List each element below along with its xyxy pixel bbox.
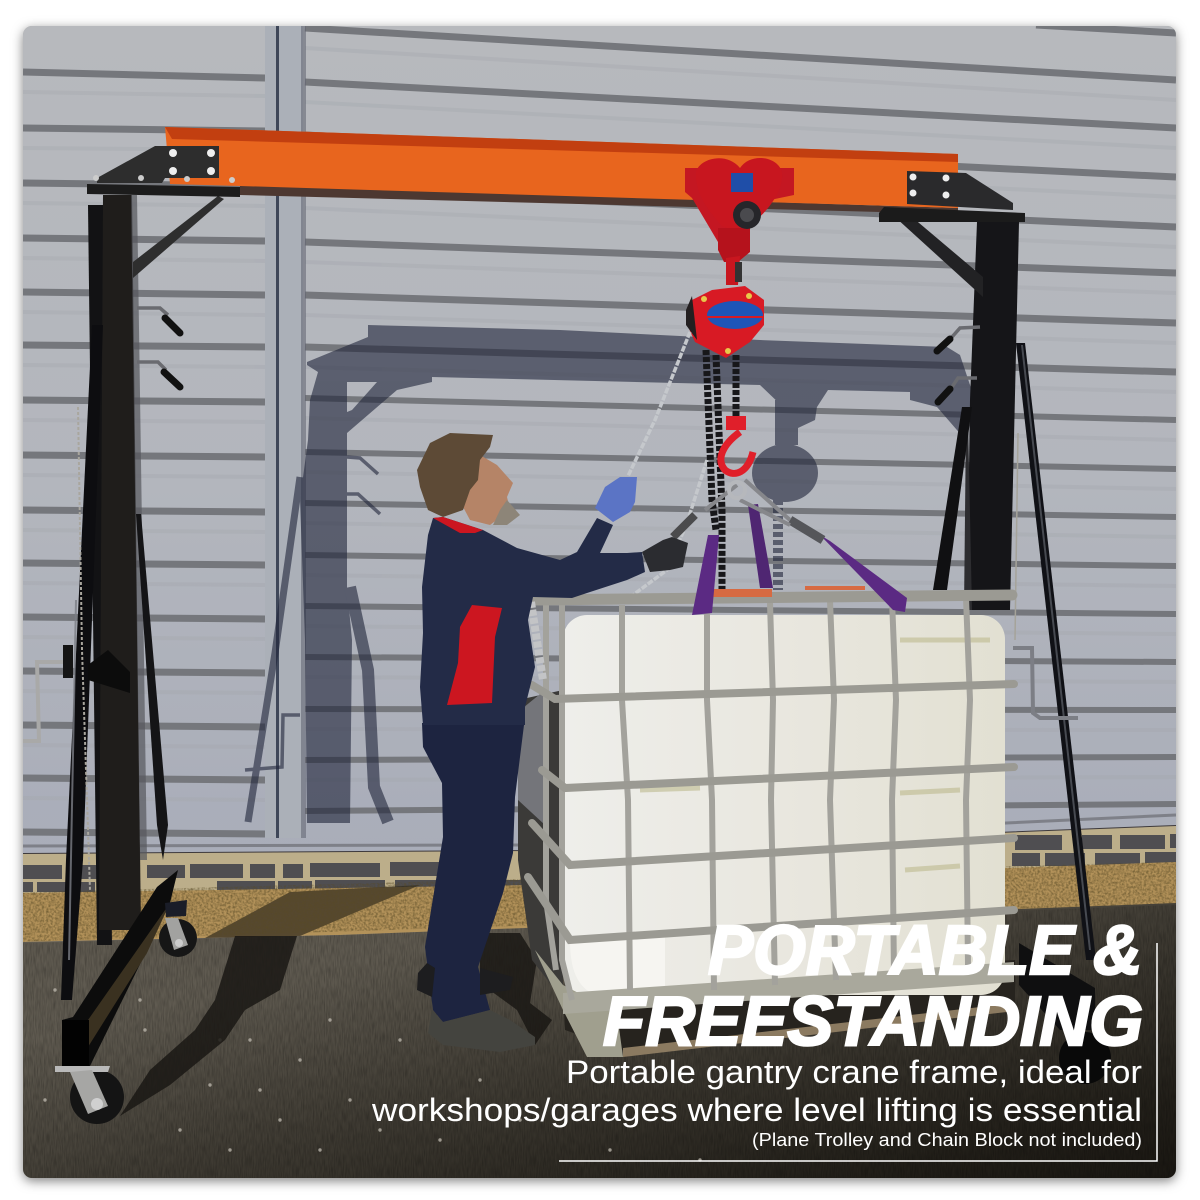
gantry shadow on ground: [120, 936, 297, 1116]
lifting hook: [721, 416, 753, 498]
description line two: workshops/garages where level lifting is essential: [371, 1092, 1142, 1128]
concrete ground: [23, 903, 1176, 1178]
main column: [99, 195, 141, 930]
handles: [952, 327, 980, 387]
base: [1019, 943, 1095, 1030]
lower glove: [642, 537, 688, 572]
gravel bed: [23, 860, 1176, 945]
chain block: [686, 286, 764, 358]
strut: [900, 222, 983, 296]
hand chain: [627, 332, 709, 594]
man: [417, 433, 688, 1052]
wall cladding: [23, 25, 1176, 856]
heading line two: FREESTANDING: [603, 982, 1143, 1060]
handles: [137, 308, 168, 370]
crank handle: [22, 662, 63, 741]
hair: [417, 433, 493, 517]
orange tank cap: [712, 586, 865, 597]
front boot: [428, 1010, 535, 1052]
left bracket: [87, 146, 240, 197]
load chains: [706, 350, 736, 590]
tank stains: [640, 640, 990, 870]
rope: [1015, 433, 1018, 640]
pallet: [535, 950, 623, 1057]
crank handle: [1013, 648, 1078, 718]
rails: [528, 595, 1014, 940]
side chain: [531, 602, 543, 680]
strut: [133, 196, 224, 278]
upper glove: [595, 477, 637, 522]
rope: [78, 407, 90, 890]
column: [967, 222, 1019, 610]
gantry: left frame: [22, 195, 224, 1066]
pallet dark gap: [563, 960, 1015, 1050]
plane trolley: [685, 158, 794, 285]
shadow of gantry on wall: [245, 325, 975, 823]
caption: [371, 911, 1143, 1150]
rear boot: [417, 963, 513, 997]
caption frame: [559, 943, 1157, 1161]
description line one: Portable gantry crane frame, ideal for: [566, 1054, 1142, 1090]
man shadow on ground: [480, 933, 552, 1045]
legs: [422, 723, 524, 1022]
beard: [493, 500, 520, 525]
leg: [1016, 343, 1096, 960]
strap: [136, 514, 168, 860]
tank cage and container: [518, 595, 1015, 1057]
face: [462, 455, 513, 525]
leg tube: [61, 325, 103, 1000]
disclaimer: (Plane Trolley and Chain Block not included): [752, 1130, 1142, 1150]
brick wall base: [23, 826, 1176, 900]
lifting slings: [673, 480, 907, 615]
rear brace: [933, 407, 972, 590]
base beam: [62, 870, 178, 1066]
jacket red panel: [447, 605, 502, 705]
label panel: [518, 690, 545, 825]
orange beam: [165, 127, 958, 214]
tank body: [563, 615, 1005, 995]
rear tube: [88, 205, 112, 945]
uprights: [546, 598, 970, 1000]
heading line one: PORTABLE &: [708, 911, 1142, 989]
gantry: rear caster: [159, 900, 197, 957]
right bracket: [879, 171, 1025, 222]
gantry: front caster: [55, 1066, 124, 1124]
jacket: [420, 517, 645, 725]
gantry: right frame: [895, 217, 1111, 1084]
left side dark: [518, 690, 563, 1000]
collar: [433, 517, 483, 533]
